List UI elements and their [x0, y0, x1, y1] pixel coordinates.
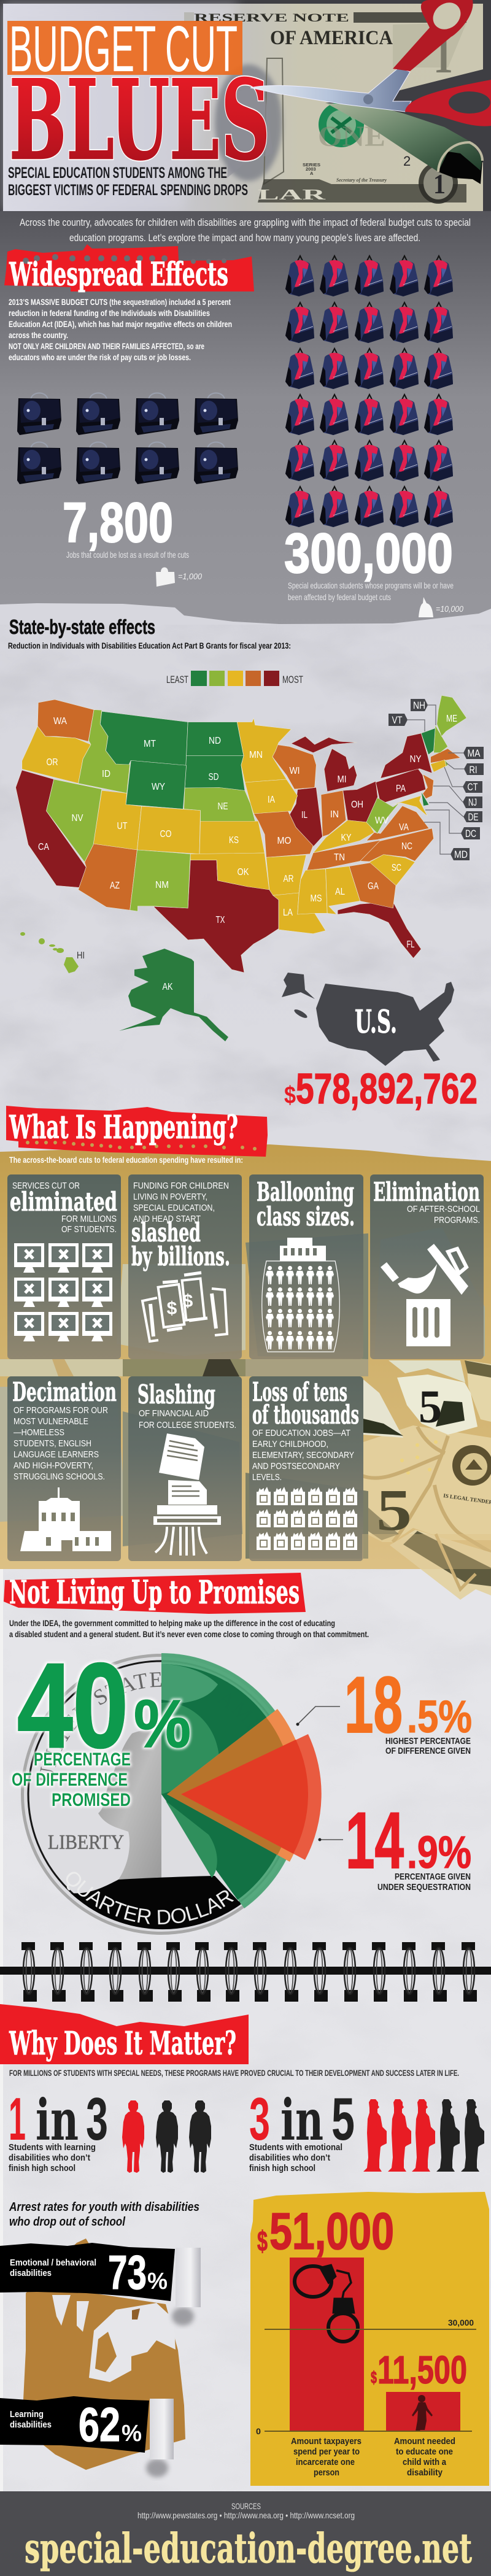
axis: zero baseline: 0: [256, 2426, 261, 2436]
caption: education: to educate one: [396, 2447, 453, 2457]
torn money collage behind panels: 5: [419, 1381, 442, 1433]
text: sequestration explanation: 2013’S MASSIVE BUDGET CUTS (the sequestration) included a 5 percent: [9, 297, 231, 307]
panel: slashing financial aid: FOR COLLEGE STUDENTS.: [139, 1420, 236, 1430]
stat: 51,000: $: [257, 2225, 268, 2257]
state abbreviations: LA: [283, 908, 293, 918]
state abbreviations: OH: [351, 800, 363, 810]
caption: education: Amount needed: [394, 2436, 455, 2447]
icon: torn banknotes: $: [167, 1298, 177, 1319]
panel: cost comparison bar chart: [250, 2192, 489, 2486]
stat: 300,000 students: 300,000: [284, 522, 453, 585]
wedge: 40 percent promised: [161, 1653, 303, 1908]
icons: five students, three red: [363, 2099, 484, 2172]
state abbreviations: NE: [217, 801, 228, 812]
panel: decimation of programs: LANGUAGE LEARNERS: [14, 1449, 99, 1460]
stat: 14.9 percent: PERCENTAGE GIVEN: [395, 1872, 471, 1882]
panel: services eliminated: SERVICES CUT OR: [12, 1181, 80, 1191]
stat: 18.5 percent: [344, 1660, 472, 1756]
heading: state-by-state effects: Reduction in Individuals with Disabilities Education Act Part B Grants for fiscal year 2013:: [8, 641, 291, 650]
panel: slashing financial aid: Slashing: [137, 1379, 215, 1409]
stat: 40 percent promised: PERCENTAGE: [34, 1749, 131, 1770]
panel: decimation of programs: Decimation: [12, 1377, 117, 1407]
stat: 11,500: $: [371, 2368, 377, 2387]
state abbreviations: ND: [209, 736, 221, 746]
stat: 18.5 percent: 18: [344, 1660, 403, 1749]
stat: 3 in 5: [249, 2085, 355, 2173]
stat: 14.9 percent: .9%: [407, 1827, 471, 1878]
state abbreviations: AR: [284, 874, 293, 884]
state abbreviations: MN: [249, 750, 263, 760]
stat: 1 in 3: in: [36, 2087, 79, 2153]
hero: torn dollar bill and title: [3, 0, 491, 211]
heading: arrest rates: who drop out of school: [9, 2215, 125, 2229]
stat: 40 percent promised: OF DIFFERENCE: [12, 1770, 128, 1790]
text: sequestration explanation: across the country.: [9, 330, 68, 340]
text: IDEA commitment: Under the IDEA, the government committed to helping make up the difference in the cost of educating: [9, 1618, 335, 1628]
map legend: least to most: LEAST: [166, 674, 188, 685]
state abbreviations: IL: [301, 810, 307, 820]
icon: overcrowded classroom: [262, 1238, 339, 1352]
title block: SPECIAL EDUCATION STUDENTS AMONG THE: [8, 164, 227, 182]
dollar bill backdrop: 2003: [306, 166, 316, 172]
map: Hawaii: [20, 932, 85, 973]
dollar bill backdrop: A: [310, 171, 314, 176]
scissors: [250, 0, 491, 126]
lower paper section background: [0, 1569, 491, 2496]
stat: 1 in 3: 3: [86, 2085, 108, 2153]
dollar bill backdrop: LAR: [258, 187, 326, 203]
torn strip: learning disabilities 62 percent: disabilities: [10, 2420, 52, 2430]
state abbreviations: KS: [229, 835, 239, 846]
coin base: UNITED STATES OF AMERICA: [39, 1672, 161, 1781]
caption: education: child with a: [403, 2457, 447, 2467]
map legend: least to most: [166, 671, 303, 686]
icon: grid of disabled computers: [14, 1243, 112, 1341]
panel: loss of education jobs: Loss of tens: [252, 1377, 347, 1407]
panel: loss of education jobs: ELEMENTARY, SECONDARY: [252, 1450, 354, 1460]
footer: sources and site: [0, 2491, 491, 2576]
stat: 300,000 students: [284, 522, 454, 602]
torn money collage behind panels: [0, 1227, 491, 1559]
heading: state-by-state effects: [8, 615, 291, 650]
coin base: LIBERTY: [48, 1831, 124, 1854]
panel: services eliminated: OF STUDENTS.: [61, 1224, 117, 1235]
state abbreviations: TX: [216, 915, 225, 925]
stat: 18.5 percent: HIGHEST PERCENTAGE: [385, 1736, 471, 1746]
bar: incarceration cost: [290, 2258, 364, 2431]
text: sequestration explanation: reduction in federal funding of the Individuals with Disabilities: [9, 308, 210, 318]
gridline: 30,000: 30,000: [448, 2318, 474, 2327]
callout tags for small northeast states: RI: [469, 764, 477, 776]
state abbreviations: [38, 714, 457, 950]
heading: What Is Happening?: [6, 1106, 268, 1157]
arrow: leader to 14.9 percent: [318, 1838, 343, 1841]
state abbreviations: PA: [396, 784, 406, 794]
treasury seal: [319, 102, 364, 147]
legend: backpack equals 10,000: [419, 597, 463, 617]
text: what is happening intro: The across-the-board cuts to federal education spending have resulted in:: [9, 1155, 243, 1165]
heading: Why Does It Matter?: [0, 2004, 249, 2064]
sources: http://www.pewstates.org • http://www.nea.org • http://www.ncset.org: [137, 2510, 355, 2520]
callout tags for small northeast states: DC: [465, 828, 476, 839]
icons: eight briefcases: [17, 393, 238, 484]
map: Hawaii: HI: [77, 951, 85, 961]
wedge: 18.5 percent highest: [167, 1709, 307, 1862]
panel: funding slashed: by billions.: [131, 1241, 230, 1271]
intro paragraph: [20, 217, 471, 244]
text: IDEA commitment: [9, 1618, 369, 1639]
state abbreviations: KY: [341, 833, 352, 843]
icons: three students, one red: [122, 2100, 211, 2173]
callout tags for small northeast states: [389, 699, 484, 860]
icon: torn banknotes: $: [183, 1291, 193, 1311]
top dark band behind hero: [0, 0, 491, 221]
icon: torn banknotes: [142, 1273, 227, 1341]
icon: briefcase, paintbrush and trash can: [381, 1244, 468, 1346]
dollar bill backdrop: ONE: [318, 120, 385, 153]
panel: loss of education jobs: [249, 1376, 363, 1561]
state abbreviations: CO: [160, 829, 172, 839]
stat: 40 percent promised: PROMISED: [52, 1790, 131, 1810]
panel: loss of education jobs: AND POSTSECONDARY: [252, 1461, 340, 1471]
panel: loss of education jobs: EARLY CHILDHOOD,: [252, 1439, 328, 1449]
state abbreviations: WI: [290, 766, 300, 776]
icons: thirty backpacks: [285, 256, 453, 527]
state abbreviations: CA: [38, 842, 49, 852]
stat: 14.9 percent: [346, 1795, 471, 1892]
callout tags for small northeast states: CT: [468, 781, 477, 793]
gray section background: [0, 211, 491, 628]
title block: [7, 13, 270, 199]
torn strip: learning disabilities 62 percent: [0, 2396, 174, 2477]
caption: incarceration: [291, 2436, 361, 2478]
title block: BIGGEST VICTIMS OF FEDERAL SPENDING DROPS: [8, 182, 248, 199]
tan section background: [0, 1144, 491, 1569]
heading: Why Does It Matter?: Why Does It Matter?: [9, 2025, 236, 2062]
dollar bill backdrop: RESERVE NOTE: [194, 12, 349, 25]
torn strip: emotional behavioral 73 percent: disabilities: [10, 2268, 52, 2278]
panel: services eliminated: eliminated: [10, 1187, 117, 1217]
stat: 7,800 jobs: Jobs that could be lost as a result of the cuts: [66, 550, 189, 560]
state abbreviations: IA: [268, 795, 275, 805]
state abbreviations: WY: [152, 782, 165, 792]
US total map with label: U.S.: [355, 1004, 397, 1041]
state abbreviations: TN: [334, 852, 345, 863]
chart: quarter coin pie: [21, 1653, 322, 1935]
legend: briefcase equals 1,000: =1,000: [178, 571, 202, 581]
states: high reduction: [37, 700, 460, 910]
state abbreviations: NM: [155, 880, 169, 890]
curled bill corner: [326, 103, 482, 184]
panel: funding slashed: SPECIAL EDUCATION,: [133, 1203, 215, 1213]
stat: 300,000 students: been affected by federal budget cuts: [288, 592, 391, 602]
stat: 40 percent promised: 40: [17, 1638, 128, 1773]
panel: funding slashed: slashed: [131, 1217, 201, 1248]
spiral binding divider: [0, 1942, 491, 2002]
callout tags for small northeast states: MD: [454, 849, 468, 860]
states: middle reduction: [22, 718, 446, 934]
states: low reduction: [47, 695, 466, 911]
icon: child walking: [412, 2395, 433, 2431]
sources: SOURCES: [231, 2501, 261, 2511]
heading: Not Living Up to Promises: Not Living Up to Promises: [9, 1574, 300, 1611]
panel: decimation of programs: STUDENTS, ENGLISH: [14, 1438, 91, 1449]
state abbreviations: MI: [338, 774, 346, 785]
state abbreviations: MO: [277, 836, 291, 846]
US total map with label: [282, 973, 454, 1066]
stat: 14.9 percent: 14: [346, 1795, 404, 1885]
state abbreviations: SC: [392, 863, 401, 873]
icon: handcuffs: [295, 2264, 358, 2342]
heading: state-by-state effects: State-by-state effects: [9, 615, 155, 638]
map: Alaska: AK: [162, 982, 173, 992]
panel: elimination of after-school programs: PROGRAMS.: [434, 1215, 480, 1225]
torn strip: learning disabilities 62 percent: %: [122, 2421, 142, 2447]
heading: Widespread Effects: [4, 244, 254, 293]
stat: 51,000: 51,000: [269, 2202, 394, 2260]
caption: education: [394, 2436, 455, 2478]
heading: What Is Happening?: What Is Happening?: [9, 1109, 238, 1146]
state abbreviations: WV: [375, 816, 389, 826]
state abbreviations: AZ: [110, 881, 120, 891]
caption: incarceration: Amount taxpayers: [291, 2436, 361, 2447]
icon: crumbling school: [20, 1487, 111, 1551]
states: least reduction: [100, 711, 435, 809]
paper section background with torn top edge: [0, 603, 491, 1166]
state abbreviations: NV: [71, 813, 83, 823]
caption: incarceration: spend per year to: [293, 2447, 360, 2457]
state abbreviations: GA: [368, 881, 379, 892]
states: most reduction: [16, 733, 432, 973]
state abbreviations: MS: [311, 893, 322, 904]
panel: ballooning class sizes: [249, 1174, 363, 1359]
panel: loss of education jobs: LEVELS.: [252, 1472, 282, 1483]
title block: BLUES: [9, 56, 270, 184]
torn strip: emotional behavioral 73 percent: Emotional / behavioral: [10, 2258, 96, 2268]
map legend: least to most: MOST: [282, 674, 303, 685]
legend: briefcase equals 1,000: [156, 567, 202, 587]
arrow: leader to 18.5 percent: [296, 1706, 340, 1726]
stat: 1 in 3: Students with learning: [9, 2142, 96, 2153]
stat: 3 in 5: finish high school: [249, 2163, 315, 2173]
panel: decimation of programs: —HOMELESS: [14, 1427, 64, 1438]
panel: loss of education jobs: OF EDUCATION JOBS—AT: [252, 1428, 350, 1438]
torn strip: emotional behavioral 73 percent: [0, 2243, 201, 2326]
panel: slashing financial aid: [128, 1376, 242, 1561]
state abbreviations: UT: [117, 821, 128, 831]
state abbreviations: WA: [53, 716, 67, 727]
caption: incarceration: incarcerate one: [296, 2457, 355, 2467]
panel: decimation of programs: MOST VULNERABLE: [14, 1416, 88, 1427]
text: sequestration explanation: [9, 297, 232, 362]
torn strip: emotional behavioral 73 percent: %: [147, 2269, 168, 2294]
wedge: 14.9 percent sequestration: [181, 1734, 322, 1860]
state abbreviations: ME: [446, 714, 457, 724]
stat: 40 percent promised: %: [134, 1686, 191, 1762]
state abbreviations: VA: [399, 822, 409, 833]
choropleth map of US states: [16, 695, 466, 973]
stat: 1 in 3: 1: [9, 2085, 26, 2153]
dollar bill backdrop: OF AMERICA: [270, 27, 393, 49]
state abbreviations: AL: [335, 887, 345, 897]
panel: loss of education jobs: of thousands: [252, 1400, 359, 1430]
title block: BUDGET CUT: [9, 13, 238, 85]
heading: Widespread Effects: Widespread Effects: [9, 256, 228, 293]
state abbreviations: SD: [209, 772, 218, 782]
state abbreviations: NC: [401, 841, 412, 852]
stat: 18.5 percent: OF DIFFERENCE GIVEN: [385, 1746, 471, 1756]
panel: decimation of programs: [7, 1376, 121, 1561]
panel: decimation of programs: OF PROGRAMS FOR OUR: [14, 1405, 108, 1416]
bar: education cost: [386, 2392, 460, 2431]
heading: arrest rates: [9, 2200, 199, 2229]
coin base: QUARTER DOLLAR: [66, 1872, 234, 1924]
state abbreviations: NY: [410, 754, 422, 765]
dollar bill backdrop: 2: [403, 153, 411, 169]
torn bill corner overlapping paper: [362, 1530, 491, 1600]
dollar bill backdrop: [3, 4, 483, 211]
callout tags for small northeast states: NJ: [468, 796, 477, 808]
text: sequestration explanation: educators who are under the risk of pay cuts or job losses.: [9, 352, 191, 362]
dollar bill backdrop: 1: [433, 168, 446, 199]
coin base: [21, 1654, 280, 1935]
caption: education: disability: [407, 2467, 443, 2478]
stat: 3 in 5: 5: [331, 2085, 355, 2153]
stat: 1 in 3: finish high school: [9, 2163, 75, 2173]
stat: 40 percent promised: [12, 1638, 191, 1810]
panel: services eliminated: [7, 1174, 121, 1359]
text: sequestration explanation: NOT ONLY ARE CHILDREN AND THEIR FAMILIES AFFECTED, so are: [9, 341, 204, 351]
dollar bill backdrop: SERIES: [303, 162, 320, 168]
torn strip: emotional behavioral 73 percent: 73: [108, 2245, 147, 2299]
callout tags for small northeast states: MA: [468, 747, 481, 759]
caption: incarceration: person: [314, 2467, 339, 2478]
stat: 3 in 5: in: [280, 2087, 323, 2153]
panel: slashing financial aid: OF FINANCIAL AID: [139, 1408, 209, 1419]
icon: grid of teaching job symbols: [257, 1487, 357, 1550]
panel: funding slashed: FUNDING FOR CHILDREN: [133, 1181, 229, 1191]
panel: funding slashed: [128, 1174, 242, 1359]
panel: ballooning class sizes: Ballooning: [257, 1177, 354, 1207]
torn money collage behind panels: 5: [376, 1477, 412, 1543]
dollar bill backdrop: 1: [433, 29, 453, 83]
text: sequestration explanation: Education Act (IDEA), which has had major negative effects on children: [9, 319, 232, 329]
callout tags for small northeast states: VT: [392, 714, 403, 726]
stat: 3 in 5: Students with emotional: [249, 2142, 342, 2153]
panel: services eliminated: FOR MILLIONS: [61, 1214, 117, 1224]
panel: funding slashed: LIVING IN POVERTY,: [133, 1192, 207, 1202]
panel: decimation of programs: AND HIGH-POVERTY,: [14, 1460, 93, 1471]
heading: Not Living Up to Promises: [4, 1573, 306, 1614]
panel: funding slashed: AND HEAD START: [133, 1214, 201, 1224]
state abbreviations: OR: [47, 757, 58, 768]
torn strip: learning disabilities 62 percent: Learning: [10, 2409, 44, 2420]
state abbreviations: ID: [102, 769, 110, 779]
legend: backpack equals 10,000: =10,000: [436, 604, 463, 614]
US total dollar amount: $: [284, 1082, 296, 1109]
stat: 14.9 percent: UNDER SEQUESTRATION: [377, 1882, 471, 1892]
callout tags for small northeast states: NH: [413, 700, 425, 711]
stat: 1 in 3: disabilities who don’t: [9, 2153, 90, 2163]
torn strip: learning disabilities 62 percent: 62: [79, 2397, 120, 2451]
dollar bill backdrop: Secretary of the Treasury: [336, 177, 387, 183]
state abbreviations: OK: [237, 867, 249, 877]
panel: elimination of after-school programs: [370, 1174, 484, 1359]
callout tags for small northeast states: DE: [468, 811, 479, 823]
portrait bust under BLUES: [227, 86, 273, 178]
state abbreviations: IN: [330, 809, 339, 820]
title block: BLUES: [9, 56, 270, 184]
stat: 1 in 3: [9, 2085, 108, 2173]
panel: decimation of programs: STRUGGLING SCHOOLS.: [14, 1471, 105, 1482]
stat: 3 in 5: disabilities who don’t: [249, 2153, 330, 2163]
state abbreviations: MT: [144, 739, 156, 749]
sources: [137, 2501, 355, 2520]
text: IDEA commitment: a disabled student and a general student. But it’s never even come close to coming through on that commitment.: [9, 1629, 369, 1639]
stat: 18.5 percent: .5%: [407, 1691, 472, 1742]
silhouette: backpack figure behind torn paper: [23, 2239, 185, 2470]
icon: paper shredder: [153, 1433, 221, 1556]
stat: 3 in 5: 3: [249, 2085, 270, 2153]
heading: arrest rates: Arrest rates for youth with disabilities: [9, 2200, 199, 2214]
panel: ballooning class sizes: class sizes.: [257, 1201, 355, 1232]
map: Alaska: [119, 949, 228, 1041]
state abbreviations: FL: [406, 939, 415, 950]
stat: 7,800 jobs: 7,800: [63, 492, 173, 554]
